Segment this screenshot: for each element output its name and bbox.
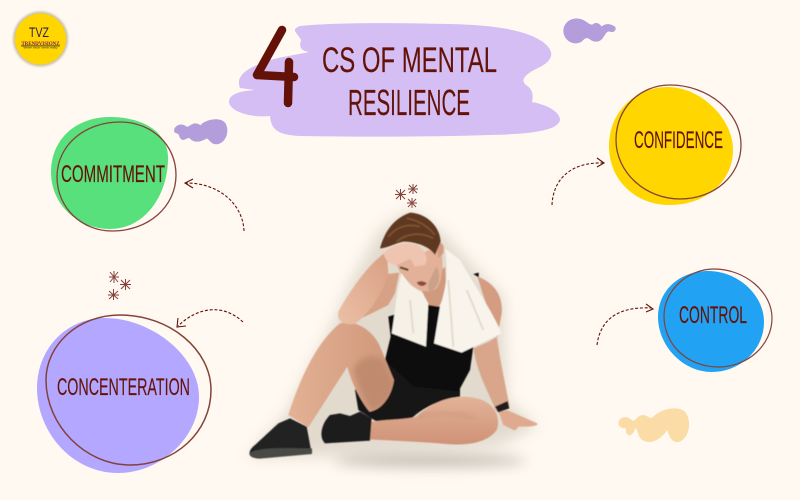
logo: TVZ badge: TVZ xyxy=(29,24,49,40)
confidence ring xyxy=(616,85,741,199)
title numeral 4 xyxy=(257,30,294,103)
panel: confidence xyxy=(609,85,741,205)
shoulder and upper arm xyxy=(353,273,399,322)
face xyxy=(397,245,442,291)
control ring xyxy=(664,269,772,367)
shorts xyxy=(355,360,460,422)
beard shadow xyxy=(428,267,439,291)
panel: control xyxy=(658,269,772,372)
logo: TVZ badge: Where vision meets reality xyxy=(24,46,58,50)
ear xyxy=(437,243,444,258)
panel: concentration xyxy=(37,315,211,473)
near leg shin and knee xyxy=(288,322,394,427)
arrow: to control xyxy=(597,304,653,345)
under-thigh shading xyxy=(353,357,394,411)
neck and chest xyxy=(422,267,447,307)
arrow: to commitment xyxy=(185,179,244,231)
concentration label: CONCENTERATION xyxy=(57,374,190,401)
commitment ring xyxy=(57,122,176,231)
towel right strip xyxy=(434,248,502,353)
strap xyxy=(473,273,479,277)
towel left strip xyxy=(392,273,428,347)
squiggle: left purple xyxy=(174,119,227,144)
figure: exhausted athlete sitting with towel xyxy=(248,210,537,467)
panel: commitment xyxy=(51,117,176,231)
title banner blob xyxy=(229,23,560,137)
title text: RESILIENCE xyxy=(348,82,470,123)
hair xyxy=(380,213,441,255)
arrow: to concentration xyxy=(177,310,243,327)
crossed leg xyxy=(369,397,498,444)
squiggle: top right purple xyxy=(563,18,616,43)
far arm xyxy=(475,277,509,412)
figure glow and floor shadow xyxy=(248,210,537,467)
control blob xyxy=(658,271,764,372)
confidence label: CONFIDENCE xyxy=(634,127,723,154)
watch xyxy=(495,401,509,412)
near shoe xyxy=(250,418,312,458)
concentration blob xyxy=(37,318,199,473)
mouth xyxy=(417,281,427,286)
logo: TVZ badge: TRENDVISIONZ xyxy=(22,41,60,47)
squiggle: bottom right peach xyxy=(618,408,689,442)
title text: CS OF MENTAL xyxy=(322,41,497,80)
commitment blob xyxy=(51,117,168,229)
title text xyxy=(322,41,497,123)
arrow: to confidence xyxy=(552,158,604,205)
logo: TVZ badge xyxy=(13,12,68,66)
confidence blob xyxy=(609,87,733,205)
control label: CONTROL xyxy=(679,302,747,329)
sparkles: upper left of concentration xyxy=(108,271,131,300)
commitment label: COMMITMENT xyxy=(61,161,165,188)
tank top xyxy=(385,303,473,392)
forearm xyxy=(338,252,388,324)
far shoe xyxy=(321,412,372,443)
concentration ring xyxy=(46,315,211,465)
hand on forehead xyxy=(383,243,427,267)
eye shadow xyxy=(400,263,423,270)
sparkles: above man xyxy=(395,184,418,208)
